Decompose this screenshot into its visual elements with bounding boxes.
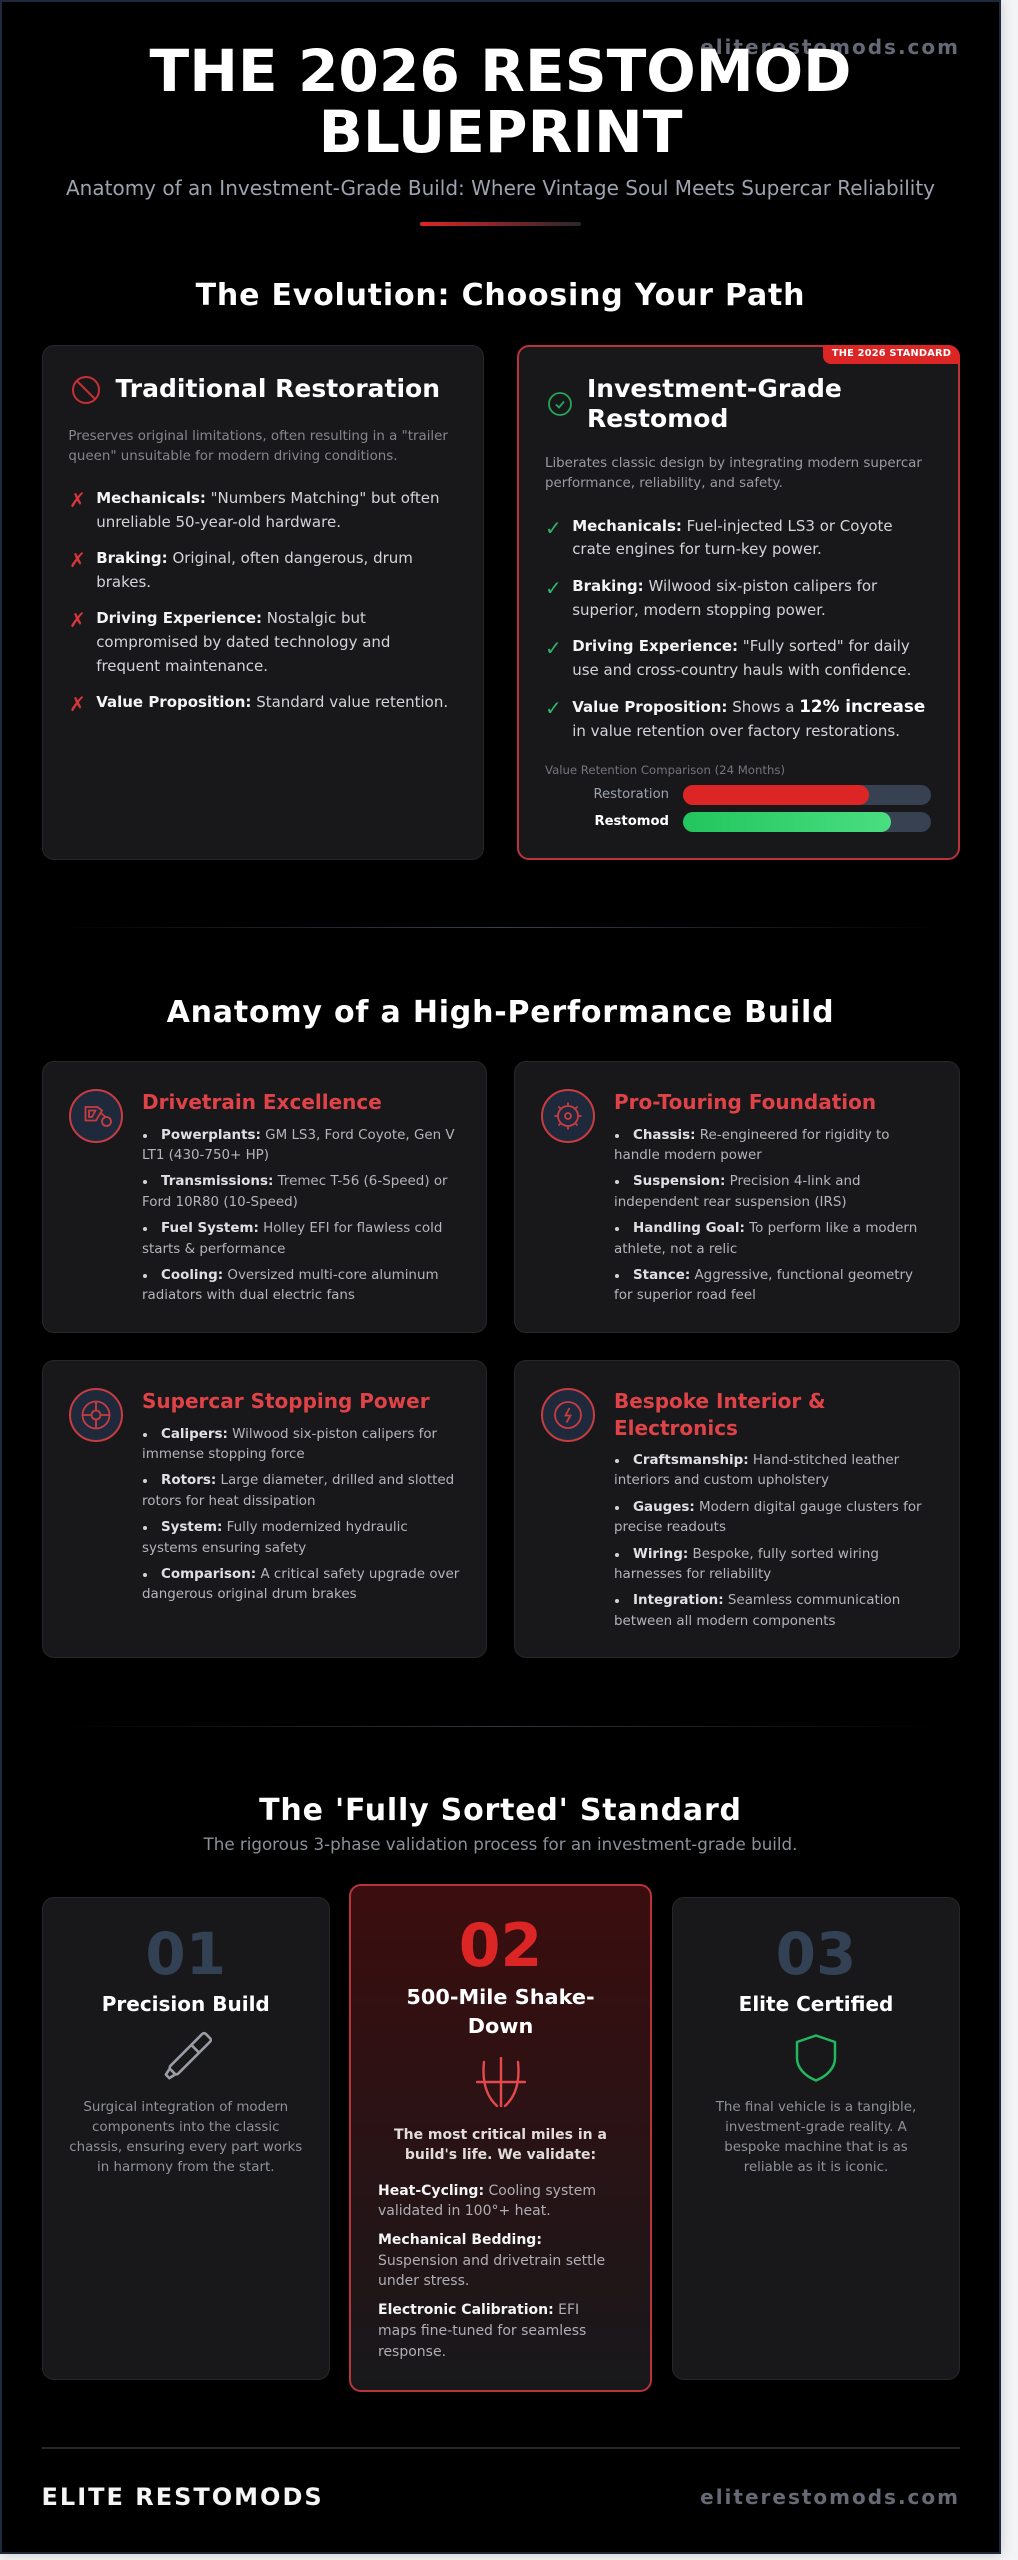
item: driving experience: frequent maintenance. <box>96 657 268 675</box>
heading: Bespoke Interior <box>614 1389 826 1440</box>
heading: Investment-Grade Restomod <box>587 374 842 432</box>
item: driving experience <box>545 636 911 679</box>
list: interior specs: Wiring: Bespoke, fully sorted wiring <box>633 1547 879 1562</box>
validation details <box>378 2182 605 2360</box>
list: interior specs: harnesses for reliability <box>614 1567 771 1582</box>
item: braking: brakes. <box>96 573 151 591</box>
description: performance, reliability, and safety. <box>545 476 783 491</box>
badge: the 2026 standard <box>823 345 960 364</box>
description <box>545 456 922 491</box>
step description: chassis, ensuring every part works <box>69 2140 302 2155</box>
list: interior specs: Craftsmanship: Hand-stitched leather <box>633 1453 899 1468</box>
list: drivetrain specs: Transmissions: Tremec T-56 (6-Speed) or <box>161 1174 448 1189</box>
panel: bespoke interior and electronics <box>514 1360 960 1658</box>
list: chassis specs: Chassis: Re-engineered for rigidity to <box>633 1128 890 1142</box>
item: mechanicals: ✓ <box>545 516 562 540</box>
list: drivetrain specs: radiators with dual electric fans <box>142 1288 355 1303</box>
heading: Traditional Restoration: Traditional Restoration <box>116 374 440 403</box>
heading: Bespoke Interior: Electronics <box>614 1416 738 1440</box>
validation details: response. <box>378 2344 446 2360</box>
item: driving experience: use and cross-country hauls with confidence. <box>572 661 911 679</box>
panel: step 03 <box>672 1897 960 2380</box>
description: Liberates classic design by integrating modern supercar <box>545 456 922 471</box>
icon: brake rotor <box>69 1388 123 1442</box>
footer brand: ELITE RESTOMODS <box>42 2483 324 2511</box>
item: value proposition: ✗ <box>69 692 86 716</box>
list: chassis specs: for superior road feel <box>614 1288 756 1303</box>
subtitle: Anatomy of an Investment-Grade Build: Where Vintage Soul Meets Supercar Reliability <box>66 176 935 200</box>
list: chassis specs: athlete, not a relic <box>614 1242 737 1257</box>
validation details: Suspension and drivetrain settle <box>378 2253 605 2269</box>
lead text: The most critical miles in a <box>394 2127 607 2143</box>
heading: Investment-Grade Restomod: Restomod <box>587 404 728 432</box>
item: driving experience: ✗ <box>69 608 86 632</box>
list: brake specs: rotors for heat dissipation <box>142 1494 316 1509</box>
icon: bolt <box>541 1388 595 1442</box>
list: interior specs: between all modern components <box>614 1614 836 1629</box>
list: interior specs: precise readouts <box>614 1520 726 1535</box>
step description: Surgical integration of modern <box>83 2100 288 2115</box>
validation details: validated in 100°+ heat. <box>378 2203 551 2219</box>
list: chassis specs: Stance: Aggressive, functional geometry <box>633 1268 913 1283</box>
step title: Down <box>468 2014 533 2038</box>
panel: step 01 <box>42 1897 330 2380</box>
list: brake specs: Comparison: A critical safety upgrade over <box>161 1567 459 1582</box>
icon: shield <box>796 2034 836 2082</box>
step description <box>69 2100 302 2175</box>
panel: traditional restoration <box>42 345 484 860</box>
item: mechanicals: Mechanicals: Fuel-injected LS3 or Coyote <box>572 517 893 535</box>
item: braking: ✓ <box>545 576 562 600</box>
step description: investment-grade reality. A <box>725 2120 907 2135</box>
item: value proposition <box>545 696 925 740</box>
step description: The final vehicle is a tangible, <box>716 2100 916 2115</box>
panel: investment-grade restomod <box>517 345 960 860</box>
number 03: 03 <box>776 1920 856 1988</box>
footer url: eliterestomods.com <box>700 2484 960 2508</box>
accent bar <box>420 222 581 226</box>
list: brake specs: systems ensuring safety <box>142 1541 306 1556</box>
panel: pro-touring foundation <box>514 1061 960 1333</box>
title: BLUEPRINT <box>319 98 682 166</box>
validation details: Electronic Calibration: EFI <box>378 2302 579 2318</box>
heading: Investment-Grade Restomod: Investment-Grade <box>587 374 842 402</box>
heading: Pro-Touring Foundation: Pro-Touring Foundation <box>614 1090 876 1114</box>
bar: restoration <box>683 785 931 805</box>
item: mechanicals: unreliable 50-year-old hardware. <box>96 513 341 531</box>
step description: components into the classic <box>92 2120 279 2135</box>
item: mechanicals: Mechanicals: "Numbers Matching" but often <box>96 489 440 507</box>
description <box>68 429 448 464</box>
list: brake specs: dangerous original drum brakes <box>142 1587 357 1602</box>
item: driving experience: compromised by dated technology and <box>96 633 390 651</box>
list: brake specs: immense stopping force <box>142 1447 305 1462</box>
title <box>150 37 851 166</box>
list: chassis specs <box>614 1128 917 1303</box>
heading: Anatomy: Anatomy of a High-Performance Build <box>167 994 834 1030</box>
item: driving experience: ✓ <box>545 636 562 660</box>
icon: gear <box>541 1089 595 1143</box>
item: value proposition: in value retention over factory restorations. <box>572 722 900 740</box>
list: drivetrain specs: Powerplants: GM LS3, Ford Coyote, Gen V <box>161 1128 455 1142</box>
list: drivetrain specs: LT1 (430-750+ HP) <box>142 1148 269 1163</box>
heading: Bespoke Interior: Bespoke Interior & <box>614 1389 826 1413</box>
bar: restomod <box>683 812 931 832</box>
validation details: Heat-Cycling: Cooling system <box>378 2182 596 2198</box>
item: mechanicals <box>69 488 440 531</box>
icon: prohibited <box>72 376 100 404</box>
icon: engine <box>69 1089 123 1143</box>
heading: Supercar Stopping Power: Supercar Stopping Power <box>142 1389 430 1413</box>
badge: the 2026 standard: THE 2026 STANDARD <box>832 348 951 359</box>
row label: restomod: Restomod <box>594 814 669 829</box>
chart label: Value Retention Comparison (24 Months) <box>545 763 785 777</box>
subheading: The rigorous 3-phase validation process for an investment-grade build. <box>204 1834 797 1854</box>
list: interior specs: Gauges: Modern digital gauge clusters for <box>633 1500 922 1515</box>
item: braking: Braking: Wilwood six-piston calipers for <box>572 577 877 595</box>
item: mechanicals: ✗ <box>69 488 86 512</box>
item: driving experience: Driving Experience: "Fully sorted" for daily <box>572 637 910 655</box>
list: brake specs: Calipers: Wilwood six-piston calipers for <box>161 1426 437 1442</box>
bar chart: value retention <box>545 763 931 832</box>
heading: Fully Sorted Standard: The 'Fully Sorted' Standard <box>259 1793 742 1828</box>
list: drivetrain specs: Ford 10R80 (10-Speed) <box>142 1195 298 1210</box>
step description: bespoke machine that is as <box>724 2140 908 2155</box>
validation details: Mechanical Bedding: <box>378 2232 542 2248</box>
icon: check circle <box>548 392 572 416</box>
number 01: 01 <box>145 1920 226 1988</box>
list: drivetrain specs: starts & performance <box>142 1242 285 1257</box>
list: chassis specs: Handling Goal: To perform like a modern <box>633 1221 917 1236</box>
title: THE 2026 RESTOMOD <box>150 37 851 105</box>
item: value proposition: ✓ <box>545 696 562 720</box>
item: driving experience: Driving Experience: Nostalgic but <box>96 609 366 627</box>
list: interior specs: interiors and custom upholstery <box>614 1473 829 1488</box>
item: mechanicals <box>545 516 893 558</box>
list: brake specs: System: Fully modernized hydraulic <box>161 1520 408 1535</box>
item: braking: Braking: Original, often dangerous, drum <box>96 549 413 567</box>
lead text: build's life. We validate: <box>405 2147 596 2163</box>
icon: road grid <box>476 2057 526 2107</box>
row label: restoration: Restoration <box>593 787 669 802</box>
step title: Elite Certified <box>739 1992 893 2016</box>
step title: Precision Build <box>102 1992 270 2016</box>
list: drivetrain specs: Cooling: Oversized multi-core aluminum <box>161 1268 439 1283</box>
step description: reliable as it is iconic. <box>744 2160 888 2175</box>
list: interior specs: Integration: Seamless communication <box>633 1593 900 1608</box>
item: value proposition: Value Proposition: Shows a 12% increase <box>572 696 925 716</box>
step description <box>716 2100 916 2175</box>
lead text <box>394 2127 607 2163</box>
list: drivetrain specs <box>142 1128 455 1303</box>
heading: The Evolution: The Evolution: Choosing Your Path <box>196 278 805 313</box>
item: value proposition <box>69 692 448 716</box>
description: queen" unsuitable for modern driving conditions. <box>68 449 398 464</box>
list: interior specs <box>614 1453 922 1629</box>
item: braking: ✗ <box>69 548 86 572</box>
list: brake specs <box>142 1426 460 1602</box>
item: mechanicals: crate engines for turn-key power. <box>572 540 822 558</box>
panel: supercar stopping power <box>42 1360 487 1658</box>
list: chassis specs: Suspension: Precision 4-link and <box>633 1174 861 1189</box>
item: braking <box>69 548 413 591</box>
watermark: top right: eliterestomods.com <box>700 35 960 59</box>
validation details: under stress. <box>378 2273 469 2289</box>
validation details: maps fine-tuned for seamless <box>378 2323 586 2339</box>
step title <box>406 1985 595 2038</box>
item: driving experience <box>69 608 390 675</box>
heading: Drivetrain Excellence: Drivetrain Excellence <box>142 1090 382 1114</box>
list: chassis specs: handle modern power <box>614 1148 762 1163</box>
step title: 500-Mile Shake- <box>406 1985 595 2009</box>
list: drivetrain specs: Fuel System: Holley EFI for flawless cold <box>161 1221 442 1236</box>
number 02: 02 <box>459 1911 542 1981</box>
item: braking <box>545 576 878 619</box>
panel: drivetrain excellence <box>42 1061 487 1333</box>
step description: in harmony from the start. <box>97 2160 274 2175</box>
panel: step 02 <box>349 1884 652 2392</box>
list: chassis specs: independent rear suspension (IRS) <box>614 1195 847 1210</box>
list: brake specs: Rotors: Large diameter, drilled and slotted <box>161 1473 454 1488</box>
description: Preserves original limitations, often resulting in a "trailer <box>68 429 448 444</box>
item: value proposition: Value Proposition: Standard value retention. <box>96 693 448 711</box>
icon: pen <box>164 2032 212 2080</box>
item: braking: superior, modern stopping power. <box>572 601 826 619</box>
